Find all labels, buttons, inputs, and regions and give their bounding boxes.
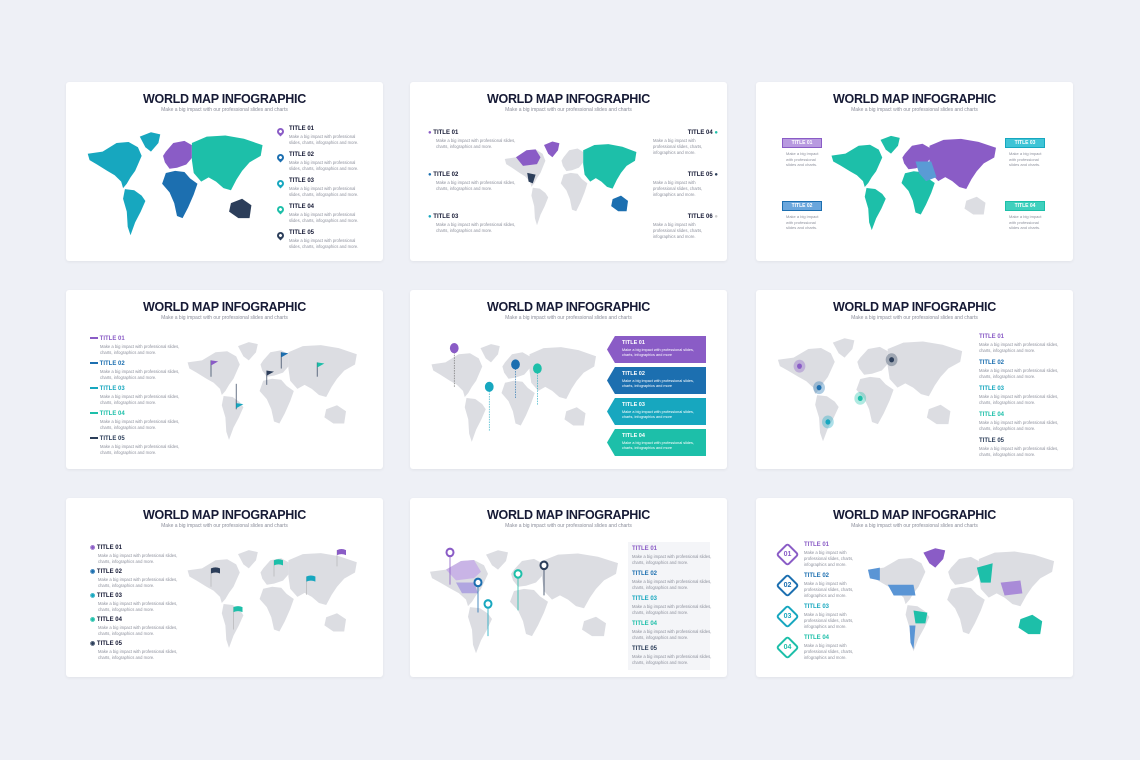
card 8: tall pins + grey legend box (410, 498, 727, 677)
arrow box 4: TITLE 04 (622, 433, 645, 439)
item 3 (632, 596, 722, 616)
item 1: ● TITLE 01 (428, 130, 458, 136)
item 3: TITLE 03 (632, 596, 657, 602)
item 3: 03 (784, 613, 791, 620)
subtitle: Make a big impact with our professional slides and charts (161, 315, 288, 321)
item 4: TITLE 04 (100, 411, 125, 417)
label 02: TITLE 02 (792, 203, 812, 209)
item 1: TITLE 01 (100, 336, 125, 342)
subtitle: Make a big impact with our professional slides and charts (505, 523, 632, 529)
title: WORLD MAP INFOGRAPHIC (833, 300, 996, 314)
item 4: Make a big impact with professional slides, charts, infographics and more. (100, 419, 179, 430)
item 2: Make a big impact with professional slides, charts, infographics and more. (289, 160, 358, 171)
item 4: TITLE 04 (804, 635, 829, 641)
item 1: TITLE 01 (632, 546, 657, 552)
item 1 (90, 544, 178, 564)
title: WORLD MAP INFOGRAPHIC (487, 508, 650, 522)
label 01 (782, 138, 822, 167)
item 1: TITLE 01 (979, 334, 1004, 340)
item 2: Make a big impact with professional slides, charts, infographics and more. (98, 577, 177, 588)
legend (90, 544, 178, 660)
item 5: TITLE 05 (100, 436, 125, 442)
label 02: Make a big impact with professional slides and charts. (786, 214, 818, 230)
item 3 (428, 214, 516, 233)
item 4: TITLE 04 (289, 204, 314, 210)
card 9: numbered diamonds (756, 498, 1073, 677)
item 2 (632, 571, 722, 591)
item 6: TITLE 06 ● (688, 214, 718, 220)
item 1: TITLE 01 (804, 542, 829, 548)
item 4 (277, 204, 358, 223)
card 2: centered map with side legends (410, 82, 727, 261)
item 1: Make a big impact with professional slides, charts, infographics and more. (98, 553, 177, 564)
item 1: Make a big impact with professional slides, charts, infographics and more. (100, 344, 179, 355)
arrow box 2: Make a big impact with professional slides, charts, infographics and more (622, 379, 694, 388)
item 1: Make a big impact with professional slides, charts, infographics and more. (289, 134, 358, 145)
item 2: ● TITLE 02 (428, 172, 458, 178)
item 5: TITLE 05 (632, 646, 657, 652)
item 5: Make a big impact with professional slides, charts, infographics and more. (632, 654, 711, 665)
item 2 (776, 573, 866, 601)
item 5 (90, 436, 180, 455)
item 2: ◉ TITLE 02 (90, 569, 122, 575)
item 5 (277, 230, 358, 249)
item 3 (277, 178, 358, 197)
label 03: TITLE 03 (1015, 140, 1035, 146)
legend (979, 334, 1058, 457)
item 3 (776, 604, 866, 632)
item 2 (90, 568, 178, 588)
item 1: Make a big impact with professional slides, charts, infographics and more. (979, 342, 1058, 353)
item 4: ◉ TITLE 04 (90, 617, 122, 623)
label 04 (1005, 201, 1045, 230)
item 2: TITLE 02 (289, 152, 314, 158)
map with pins (426, 546, 626, 664)
title: WORLD MAP INFOGRAPHIC (833, 92, 996, 106)
item 5: TITLE 05 (979, 438, 1004, 444)
item 4 (632, 621, 722, 641)
item 5 (653, 172, 718, 197)
arrow box 3: TITLE 03 (622, 402, 645, 408)
item 2: Make a big impact with professional slides, charts, infographics and more. (436, 180, 515, 191)
item 3 (90, 592, 178, 612)
subtitle: Make a big impact with our professional slides and charts (851, 315, 978, 321)
item 5: Make a big impact with professional slides, charts, infographics and more. (289, 238, 358, 249)
item 2 (428, 172, 516, 191)
item 2: TITLE 02 (100, 361, 125, 367)
item 2: Make a big impact with professional slides, charts, infographics and more. (100, 369, 179, 380)
item 5: Make a big impact with professional slides, charts, infographics and more. (653, 180, 702, 197)
card 5: arrow boxes (410, 290, 727, 469)
label 04: Make a big impact with professional slides and charts. (1009, 214, 1041, 230)
item 4 (90, 410, 180, 430)
arrow box 1: Make a big impact with professional slides, charts, infographics and more (622, 348, 694, 357)
item 1 (428, 130, 516, 149)
map with flags (184, 546, 364, 658)
item 5 (979, 438, 1058, 457)
subtitle: Make a big impact with our professional slides and charts (161, 523, 288, 529)
item 6 (653, 214, 718, 239)
item 3: Make a big impact with professional slides, charts, infographics and more. (436, 222, 515, 233)
item 4: Make a big impact with professional slides, charts, infographics and more. (289, 212, 358, 223)
arrow box 4 (607, 429, 706, 456)
item 4: Make a big impact with professional slides, charts, infographics and more. (98, 625, 177, 636)
arrow box 2 (607, 367, 706, 394)
map (504, 142, 636, 225)
item 3: TITLE 03 (289, 178, 314, 184)
item 2 (979, 360, 1058, 379)
item 4: TITLE 04 (632, 621, 657, 627)
item 3 (979, 386, 1058, 405)
map with pins (432, 343, 596, 442)
item 5: TITLE 05 ● (688, 172, 718, 178)
map (832, 136, 996, 230)
left legend (428, 130, 516, 233)
title: WORLD MAP INFOGRAPHIC (487, 92, 650, 106)
item 1 (632, 546, 722, 566)
label 01: TITLE 01 (792, 140, 812, 146)
item 3: Make a big impact with professional slides, charts, infographics and more. (100, 394, 179, 405)
label 02 (782, 201, 822, 230)
legend (90, 336, 180, 455)
item 2: TITLE 02 (804, 573, 829, 579)
item 5 (90, 640, 180, 661)
item 3: ● TITLE 03 (428, 214, 458, 220)
map with flags (188, 342, 357, 440)
item 2: TITLE 02 (632, 571, 657, 577)
subtitle: Make a big impact with our professional slides and charts (505, 107, 632, 113)
item 1 (979, 334, 1058, 353)
item 4: Make a big impact with professional slides, charts, infographics and more. (632, 629, 711, 640)
item 3 (90, 386, 180, 405)
label 03: Make a big impact with professional slides and charts. (1009, 151, 1041, 167)
title: WORLD MAP INFOGRAPHIC (833, 508, 996, 522)
item 1: 01 (784, 551, 791, 558)
item 4: TITLE 04 (979, 412, 1004, 418)
label 04: TITLE 04 (1015, 203, 1035, 209)
item 3: Make a big impact with professional slides, charts, infographics and more. (289, 186, 358, 197)
right legend (653, 130, 718, 239)
arrow box 1: TITLE 01 (622, 340, 645, 346)
subtitle: Make a big impact with our professional slides and charts (851, 107, 978, 113)
subtitle: Make a big impact with our professional slides and charts (161, 107, 288, 113)
item 1 (277, 126, 358, 145)
item 4: 04 (784, 644, 791, 651)
item 2: 02 (784, 582, 791, 589)
item 1: Make a big impact with professional slides, charts, infographics and more. (632, 554, 711, 565)
title: WORLD MAP INFOGRAPHIC (487, 300, 650, 314)
item 1: ◉ TITLE 01 (90, 545, 122, 551)
item 3: TITLE 03 (979, 386, 1004, 392)
item 2: TITLE 02 (979, 360, 1004, 366)
item 4: Make a big impact with professional slides, charts, infographics and more. (653, 138, 702, 155)
item 5: Make a big impact with professional slides, charts, infographics and more. (100, 444, 179, 455)
arrow box 1 (607, 336, 706, 363)
legend box (628, 542, 710, 670)
item 1: Make a big impact with professional slides, charts, infographics and more. (436, 138, 515, 149)
item 1: Make a big impact with professional slides, charts, infographics and more. (804, 550, 853, 567)
item 2: Make a big impact with professional slides, charts, infographics and more. (632, 579, 711, 590)
label 03 (1005, 138, 1045, 167)
map: continents colored (88, 132, 262, 236)
card 4: flags map (66, 290, 383, 469)
title: WORLD MAP INFOGRAPHIC (143, 508, 306, 522)
item 2: Make a big impact with professional slides, charts, infographics and more. (804, 581, 853, 598)
item 5: Make a big impact with professional slides, charts, infographics and more. (98, 649, 177, 660)
card 6: dots map (756, 290, 1073, 469)
legend (776, 542, 866, 670)
subtitle: Make a big impact with our professional slides and charts (505, 315, 632, 321)
subtitle: Make a big impact with our professional slides and charts (851, 523, 978, 529)
item 5: ◉ TITLE 05 (90, 641, 122, 647)
item 4: Make a big impact with professional slides, charts, infographics and more. (979, 420, 1058, 431)
item 4 (90, 616, 180, 637)
item 3: ◉ TITLE 03 (90, 593, 122, 599)
item 4 (776, 635, 866, 663)
item 6: Make a big impact with professional slides, charts, infographics and more. (653, 222, 702, 239)
item 5: TITLE 05 (289, 230, 314, 236)
item 3: Make a big impact with professional slides, charts, infographics and more. (98, 601, 177, 612)
arrow box 3: Make a big impact with professional slides, charts, infographics and more (622, 410, 694, 419)
item 4: Make a big impact with professional slides, charts, infographics and more. (804, 643, 853, 660)
item 3: Make a big impact with professional slides, charts, infographics and more. (804, 612, 853, 629)
card 1: colored continents (66, 82, 383, 261)
map with dots (778, 338, 962, 441)
label 01: Make a big impact with professional slides and charts. (786, 151, 818, 167)
title: WORLD MAP INFOGRAPHIC (143, 300, 306, 314)
card 3: map with label boxes (756, 82, 1073, 261)
item 3: TITLE 03 (100, 386, 125, 392)
item 1 (776, 542, 866, 570)
arrow box 3 (607, 398, 706, 425)
item 2 (90, 360, 180, 380)
card 7: waving flags (66, 498, 383, 677)
item 2: Make a big impact with professional slides, charts, infographics and more. (979, 368, 1058, 379)
item 2 (277, 152, 358, 171)
item 4 (979, 412, 1058, 431)
item 5 (632, 646, 722, 666)
arrow box 2: TITLE 02 (622, 371, 645, 377)
item 1 (90, 336, 180, 355)
legend (277, 126, 358, 249)
item 1: TITLE 01 (289, 126, 314, 132)
item 3: Make a big impact with professional slides, charts, infographics and more. (632, 604, 711, 615)
item 4: TITLE 04 ● (688, 130, 718, 136)
item 3: TITLE 03 (804, 604, 829, 610)
item 4 (653, 130, 718, 155)
item 3: Make a big impact with professional slides, charts, infographics and more. (979, 394, 1058, 405)
item 5: Make a big impact with professional slides, charts, infographics and more. (979, 446, 1058, 457)
map with highlighted countries (864, 544, 1062, 662)
title: WORLD MAP INFOGRAPHIC (143, 92, 306, 106)
arrow box 4: Make a big impact with professional slides, charts, infographics and more (622, 441, 694, 450)
